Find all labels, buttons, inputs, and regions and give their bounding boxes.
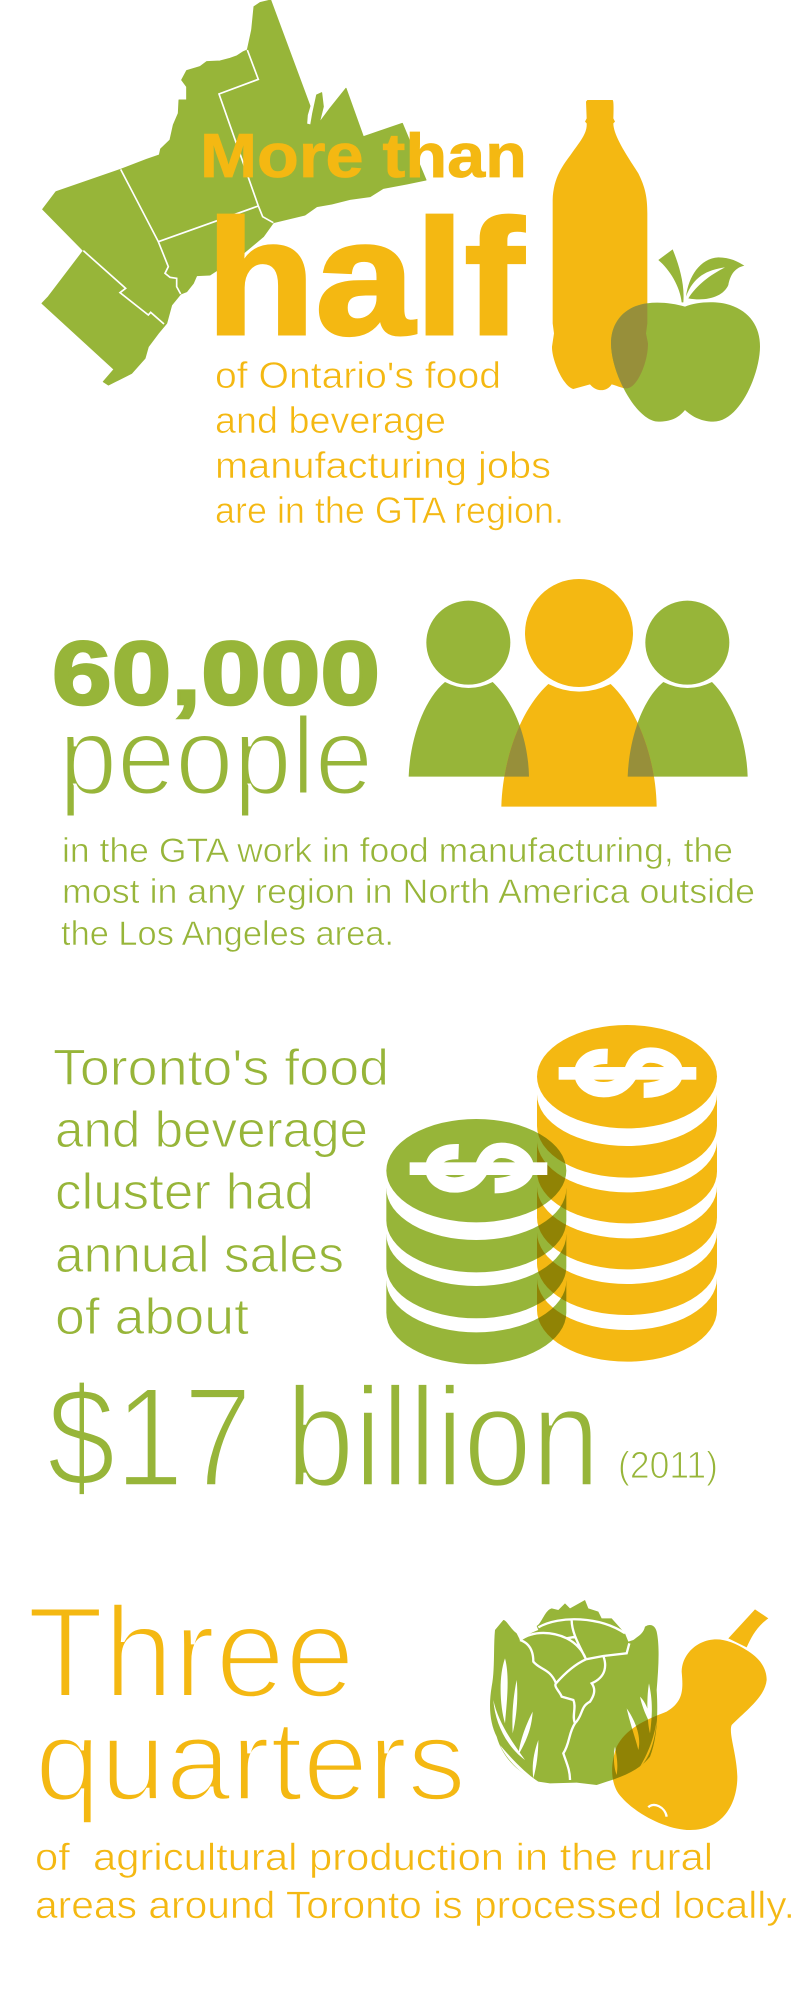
panel: 60,000 people bbox=[52, 579, 755, 953]
text block: GTA workers bbox=[61, 832, 755, 953]
panel: three quarters bbox=[27, 1579, 795, 1927]
heading: 60,000: 60,000 bbox=[52, 624, 380, 724]
text block: agricultural production: areas around Toronto is processed locally. bbox=[35, 1885, 795, 1927]
text block: Ontario jobs: manufacturing jobs bbox=[215, 445, 551, 486]
heading: More than: More than bbox=[200, 122, 527, 191]
icon: bottle and apple bbox=[552, 100, 760, 422]
text block: Toronto cluster: Toronto's food bbox=[53, 1039, 389, 1096]
text block: GTA workers: in the GTA work in food manufacturing, the bbox=[62, 832, 733, 870]
panel: more than half bbox=[42, 0, 760, 531]
text block: Ontario jobs: are in the GTA region. bbox=[215, 490, 564, 531]
icon: three people bbox=[409, 579, 748, 807]
label: year 2011: (2011) bbox=[618, 1445, 718, 1487]
heading: $17 billion: $17 billion bbox=[47, 1358, 600, 1517]
text block: Ontario jobs bbox=[215, 355, 564, 531]
text block: Toronto cluster: and beverage bbox=[55, 1101, 368, 1158]
icon: green coin stack bbox=[386, 1119, 566, 1364]
panel: 17 billion in sales bbox=[47, 1025, 718, 1517]
text block: Ontario jobs: and beverage bbox=[215, 400, 446, 441]
icon: yellow coin stack bbox=[537, 1025, 717, 1362]
text block: agricultural production: of agricultural production in the rural bbox=[35, 1837, 713, 1879]
map of the GTA region bbox=[42, 0, 426, 385]
text block: Toronto cluster: cluster had bbox=[55, 1163, 314, 1220]
text block: GTA workers: most in any region in North America outside bbox=[62, 873, 755, 911]
heading: half: half bbox=[206, 186, 524, 369]
heading: Three: Three bbox=[27, 1579, 355, 1725]
text block: Ontario jobs: of Ontario's food bbox=[215, 355, 501, 396]
heading: people: people bbox=[59, 695, 373, 818]
text block: GTA workers: the Los Angeles area. bbox=[61, 915, 394, 953]
text block: Toronto cluster bbox=[53, 1039, 389, 1345]
icon: dollar sign on green coin bbox=[410, 1150, 547, 1186]
icon: squash bbox=[612, 1609, 768, 1830]
icon: dollar sign on yellow coin bbox=[559, 1055, 696, 1090]
icon: cabbage bbox=[490, 1600, 659, 1785]
heading: quarters: quarters bbox=[35, 1697, 466, 1825]
text block: agricultural production bbox=[35, 1837, 795, 1927]
text block: Toronto cluster: of about bbox=[55, 1288, 249, 1345]
text block: Toronto cluster: annual sales bbox=[55, 1226, 344, 1283]
